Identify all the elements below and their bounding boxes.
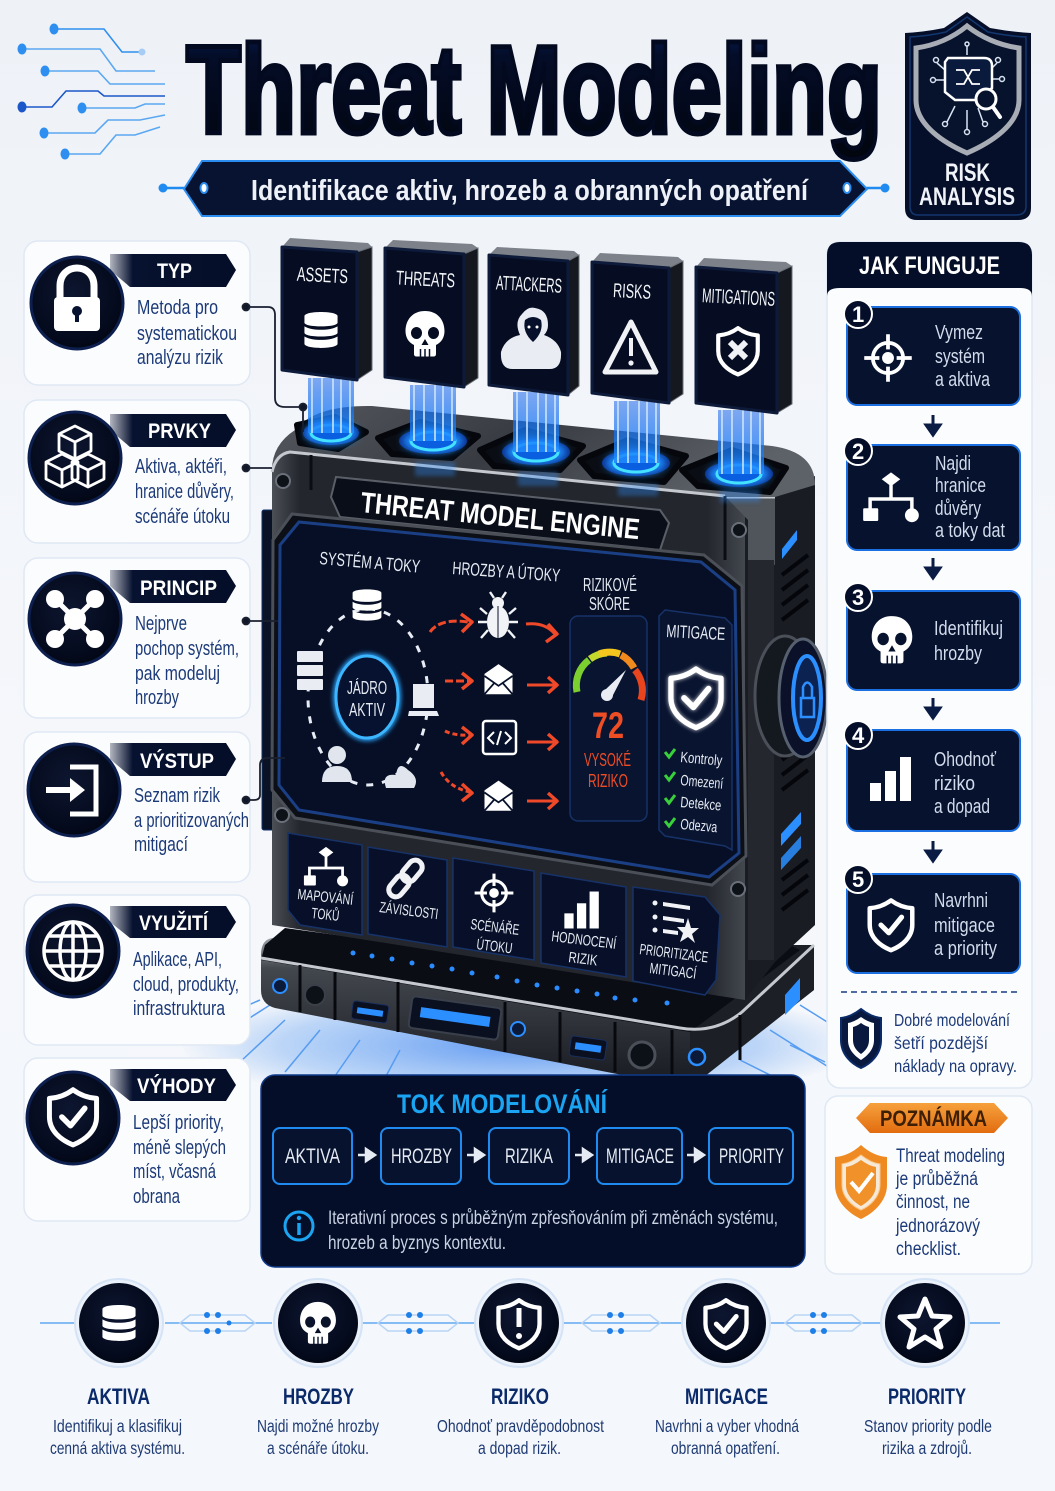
knob [755,636,827,757]
screen: risk score: RIZIKO [588,771,628,791]
plate [331,477,669,550]
bottom: hrozby: a scénáře útoku. [267,1438,369,1458]
screen: mitigation: MITIGACE [666,621,726,644]
icon: cubes [29,412,121,504]
card: attackers [489,247,579,395]
arrow [926,415,940,435]
panel: typ: Metoda pro [137,297,218,319]
card: mitigations: MITIGATIONS [701,285,776,311]
card: mitigations [696,258,792,413]
screen: mitigation: Omezení [680,772,725,793]
bottom: aktiva: AKTIVA [87,1384,150,1409]
panel: prvky: Aktiva, aktéři, [135,456,227,478]
badge: risk analysis: ANALYSIS [919,183,1015,211]
subtitle ribbon: Identifikace aktiv, hrozeb a obranných opatření [251,175,809,207]
icon: orange shield [835,1145,887,1219]
panel: princip: pak modeluj [135,663,220,685]
bottom: aktiva: Identifikuj a klasifikuj [53,1416,182,1436]
icon: shield check [27,1072,119,1164]
floor light rays [180,985,860,1105]
step 1: systém [935,346,985,368]
bottom: hrozby: HROZBY [283,1384,354,1409]
panel: poznamka: checklist. [896,1239,961,1260]
bottom: hrozby: Najdi možné hrozby [257,1416,379,1436]
note: savings: šetří pozdější [894,1033,988,1053]
step 2: hranice [935,475,986,497]
screen: mitigation: Odezva [680,816,718,836]
note: savings: náklady na opravy. [894,1056,1017,1076]
step 2: důvěry [935,498,981,520]
machine: threat model engine [261,406,827,1088]
bottom: mitigace: obranná opatření. [671,1438,780,1458]
panel: typ: TYP [157,260,192,283]
circuit decoration top left [18,24,165,160]
panel: poznamka: jednorázový [895,1216,980,1237]
step 3 [844,583,1020,690]
panel: prvky: PRVKY [148,420,211,443]
machine modules strip: ÚTOKU [476,936,513,957]
panel: vystup: mitigací [134,834,188,856]
panel: tok modelovani [261,1075,805,1267]
bottom: aktiva: cenná aktiva systému. [50,1438,185,1458]
side lights [781,530,801,870]
screen: system and flows: SYSTÉM A TOKY [319,548,421,577]
step 2: a toky dat [935,520,1005,542]
screen: system and flows [297,548,439,788]
step 5: a priority [934,938,997,960]
arrow [926,698,940,718]
panel: princip [24,558,250,718]
flow boxes: AKTIVA [285,1145,340,1168]
step 5: 5 [852,867,864,892]
icon: lock [31,257,123,349]
panel: tok modelovani: hrozeb a byznys kontextu. [328,1233,506,1254]
panel: vyhody [24,1058,250,1221]
step 2 [844,437,1020,550]
icon: network [29,573,121,665]
panel: typ [24,241,250,385]
screen: risk score: VYSOKÉ [584,750,631,770]
bottom: riziko: RIZIKO [491,1384,549,1409]
step 1: 1 [852,302,864,327]
panel: poznamka: Threat modeling [896,1146,1005,1167]
machine modules strip: PRIORITIZACE [639,941,709,966]
panel: vystup: Seznam rizik [134,785,221,807]
screen: risk score: SKÓRE [589,593,630,614]
flow boxes: PRIORITY [719,1145,784,1168]
panel: prvky: hranice důvěry, [135,481,234,503]
bottom: mitigace [655,1279,799,1458]
step 5 [844,865,1020,973]
screen: mitigation: Detekce [680,794,722,815]
card: threats [385,240,478,387]
note: savings [841,1009,1017,1076]
screen: risk score: RIZIKOVÉ [583,575,637,595]
panel: vyhody: obrana [133,1186,181,1208]
step 4: a dopad [934,796,990,818]
card: attackers: ATTACKERS [495,272,563,298]
icon: globe [27,905,119,997]
screen: risk score [570,575,647,821]
panel: vyuziti: VYUŽITÍ [139,911,209,935]
step 2: Najdi [935,453,971,475]
panel: vyuziti [24,895,250,1045]
step 4: 4 [852,723,865,748]
icon: bug [478,592,518,638]
step 3: Identifikuj [934,618,1003,640]
card: risks [592,253,683,403]
bottom: priority: Stanov priority podle [864,1416,992,1436]
panel: vystup [24,732,250,882]
screen: system and flows: JÁDRO [347,678,387,698]
machine modules strip: MAPOVÁNÍ [297,886,355,909]
step 4 [844,721,1020,831]
base [261,928,814,1088]
screen: mitigation [659,610,732,850]
panel: poznamka: POZNÁMKA [880,1106,987,1131]
panel: vyhody: méně slepých [133,1137,226,1159]
machine modules strip: ZÁVISLOSTI [379,899,439,923]
bottom: riziko [437,1279,604,1458]
gauge [576,652,642,700]
subtitle ribbon [158,161,890,216]
screen [272,514,746,885]
screen: risk score: 72 [592,705,624,746]
icon: exit arrow [28,744,120,836]
bottom: riziko: a dopad rizik. [478,1438,561,1458]
card: threats: THREATS [395,267,456,293]
panel: vyuziti: Aplikace, API, [133,949,222,971]
machine modules strip: HODNOCENÍ [551,928,618,953]
machine modules strip: SCÉNÁŘE [470,916,520,939]
panel: jak funguje: JAK FUNGUJE [859,252,1000,280]
bottom: riziko: Ohodnoť pravděpodobnost [437,1416,604,1436]
panel: vystup: VÝSTUP [140,749,214,773]
step 5: Navrhni [934,890,988,912]
panel: prvky: scénáře útoku [135,506,230,528]
panel: typ: analýzu rizik [137,347,224,369]
flow boxes: MITIGACE [606,1145,674,1168]
bottom: mitigace: MITIGACE [685,1384,768,1409]
screws [275,474,746,896]
panel: tok modelovani: TOK MODELOVÁNÍ [397,1088,608,1119]
step 3: 3 [852,585,864,610]
panel: vyhody: Lepší priority, [133,1112,224,1134]
screen: threats and attacks [430,557,561,811]
panel: typ: systematickou [137,323,237,345]
panel: poznamka: je průběžná [895,1169,978,1190]
arrow [926,558,940,578]
machine modules strip: MITIGACÍ [649,960,698,983]
card: assets [282,238,372,380]
panel: vyuziti: cloud, produkty, [133,974,239,996]
body [272,452,745,1000]
badge: risk analysis: RISK [945,159,990,187]
badge: risk analysis [905,12,1031,220]
icon: info [285,1212,313,1240]
panel: vyhody: míst, včasná [133,1161,217,1183]
screen: mitigation: Kontroly [680,749,723,770]
panel: vyuziti: infrastruktura [133,998,226,1020]
panel: poznamka [825,1096,1032,1274]
screen: threats and attacks: HROZBY A ÚTOKY [452,557,561,586]
step 3: hrozby [934,643,982,665]
step 4: Ohodnoť [934,749,996,771]
bottom connectors [40,1312,1000,1334]
panel: vyhody: VÝHODY [137,1074,216,1098]
bottom: priority: rizika a zdrojů. [882,1438,972,1458]
card: risks: RISKS [612,280,652,304]
step 5: mitigace [934,915,995,937]
note: savings: Dobré modelování [894,1010,1010,1030]
flow boxes: RIZIKA [505,1145,553,1168]
side [725,476,815,1000]
panel: princip: PRINCIP [140,577,217,600]
pods [297,417,786,502]
step 1: Vymez [935,322,983,344]
panel: princip: Nejprve [135,613,187,635]
panel: princip: hrozby [135,687,179,709]
step 1: a aktiva [935,369,991,391]
panel: vystup: a prioritizovaných [134,810,249,832]
left edge strip [262,510,274,830]
panel: prvky [24,400,250,543]
machine modules strip: RIZIK [568,949,598,970]
step 2: 2 [852,439,864,464]
panel: tok modelovani: Iterativní proces s průběžným zpřesňováním při změnách systému, [328,1208,778,1229]
base lights [273,978,800,1068]
step 1 [844,300,1020,405]
card: assets: ASSETS [296,264,348,288]
icon: chain [386,857,425,900]
flow boxes: HROZBY [391,1145,452,1168]
bottom: hrozby [257,1279,379,1458]
panel: jak funguje [827,242,1032,1088]
bottom: priority [864,1279,992,1458]
connector lines [242,304,306,804]
panel: princip: pochop systém, [135,638,239,660]
bottom: aktiva [50,1279,185,1458]
machine: threat model engine: THREAT MODEL ENGINE [359,487,641,546]
machine modules strip: TOKŮ [311,904,340,925]
bottom: mitigace: Navrhni a vyber vhodná [655,1416,799,1436]
bottom: priority: PRIORITY [888,1384,966,1409]
step 4: riziko [934,773,975,795]
flow boxes [273,1128,793,1184]
screen: system and flows: AKTIV [349,700,385,720]
beams [308,378,764,474]
machine modules strip [288,833,720,995]
arrow [926,841,940,861]
top surface [272,406,815,497]
panel: poznamka: činnost, ne [896,1192,970,1213]
